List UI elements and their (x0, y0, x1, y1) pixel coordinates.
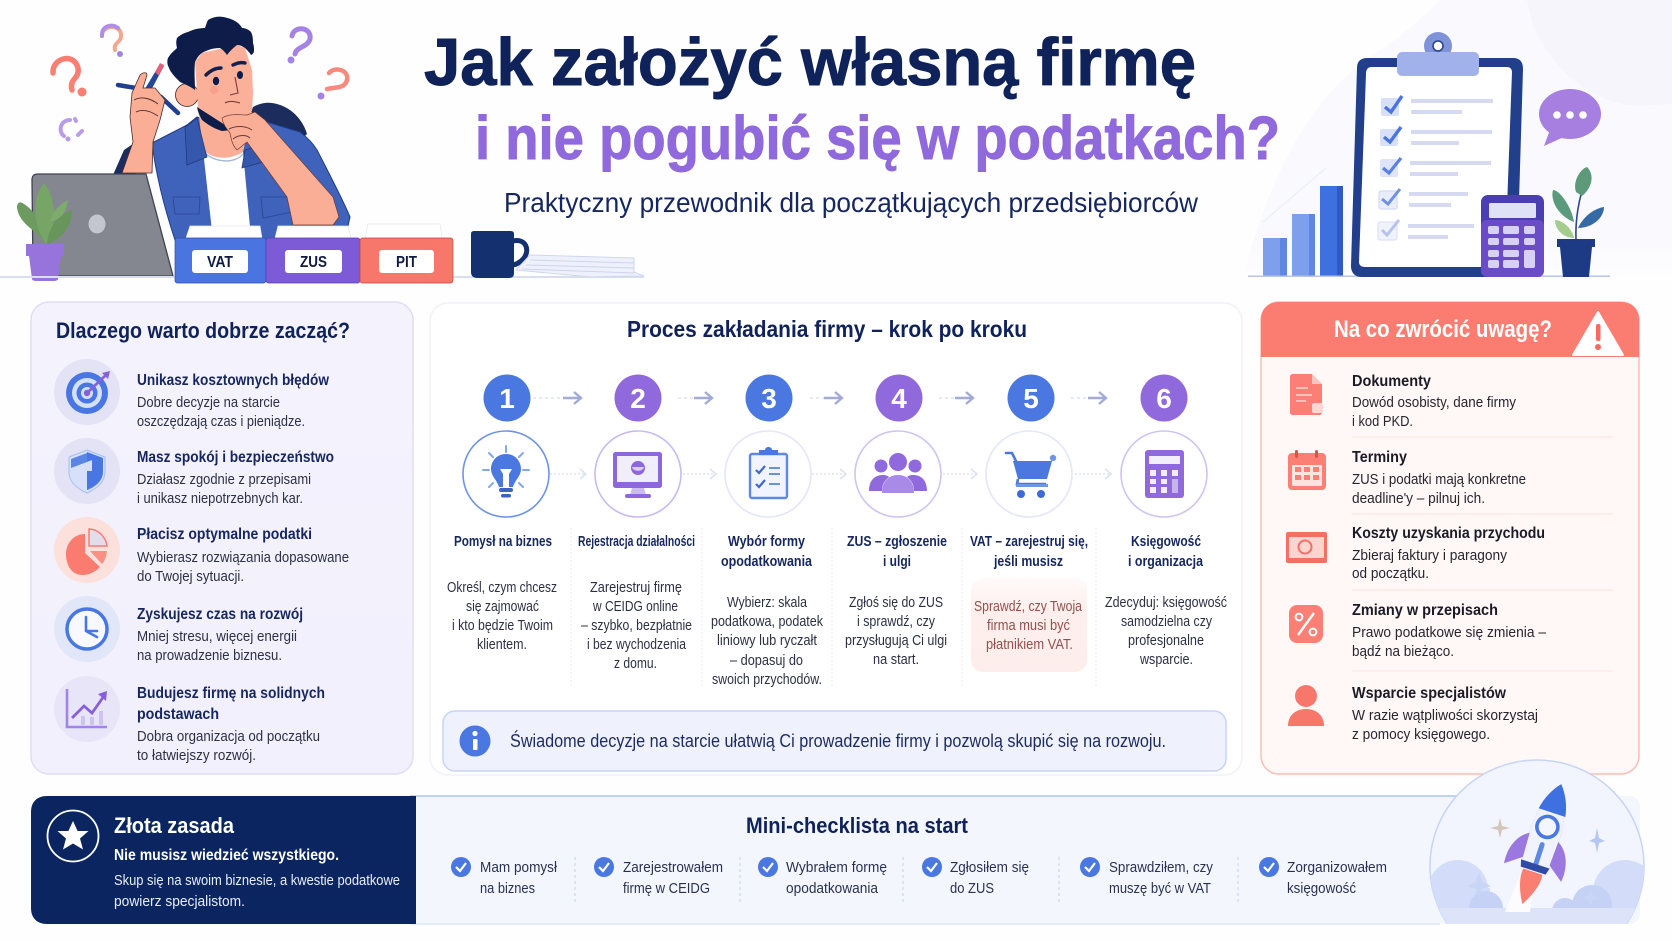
box PIT (360, 238, 453, 283)
step 3: Wybierz: skala (727, 595, 808, 611)
item: avoid costly mistakes: Unikasz kosztownych błędów (137, 372, 330, 389)
left arm and hand with pen (118, 63, 178, 173)
step 3: – dopasuj do (730, 653, 803, 669)
shirt (152, 117, 350, 240)
panel heading: Na co zwrócić uwagę? (1334, 316, 1552, 343)
plant (1552, 167, 1604, 277)
number row arrows (533, 392, 1106, 404)
box VAT (175, 238, 266, 283)
check item 2 (594, 857, 723, 897)
checklist rows (1378, 96, 1493, 240)
step 6: 6 (1156, 383, 1172, 414)
step 3: Wybór formy (728, 534, 805, 550)
item: peace and security: Masz spokój i bezpieczeństwo (137, 449, 334, 466)
item: documents: Dokumenty (1352, 373, 1431, 390)
item: documents (1290, 373, 1516, 430)
item: income costs: Koszty uzyskania przychodu (1352, 525, 1545, 542)
panel: what to watch out for (1261, 302, 1639, 774)
step 3: liniowy lub ryczałt (717, 633, 817, 649)
step 4: ZUS – zgłoszenie (847, 534, 947, 550)
step 2: i bez wychodzenia (587, 637, 687, 653)
step 2: Rejestracja działalności (578, 534, 695, 550)
box ZUS: ZUS (300, 254, 327, 271)
stars (1468, 818, 1605, 893)
step 2: 2 (630, 383, 646, 414)
step 5: jeśli musisz (993, 554, 1063, 570)
pockets (173, 197, 292, 218)
step 2: Zarejestruj firmę (590, 580, 682, 596)
panel: golden rule: Nie musisz wiedzieć wszystkiego. (114, 847, 339, 864)
item: deadlines: Terminy (1352, 449, 1407, 466)
step 2: – szybko, bezpłatnie (581, 618, 692, 634)
step 4: i ulgi (883, 554, 911, 570)
step 4: przysługują Ci ulgi (845, 633, 947, 649)
icon: group of people (869, 453, 927, 493)
callout: VAT warning: płatnikiem VAT. (986, 637, 1073, 653)
item: income costs (1286, 525, 1545, 582)
callout: VAT warning: firma musi być (987, 618, 1070, 634)
check item 4: do ZUS (950, 881, 994, 897)
panel: golden rule: powierz specjalistom. (114, 894, 245, 910)
item: time for growth: na prowadzenie biznesu. (137, 648, 282, 664)
item: solid foundations: to łatwiejszy rozwój. (137, 748, 256, 764)
box VAT: VAT (207, 254, 233, 271)
check item 5: muszę być w VAT (1109, 881, 1211, 897)
item: documents: Dowód osobisty, dane firmy (1352, 394, 1516, 411)
neck (198, 108, 252, 158)
item: income costs: Zbieraj faktury i paragony (1352, 547, 1507, 564)
item: regulation changes: bądź na bieżąco. (1352, 643, 1454, 660)
item: deadlines: deadline'y – pilnuj ich. (1352, 490, 1485, 507)
panel: golden rule (31, 796, 416, 924)
step 1: klientem. (477, 637, 527, 653)
step 5 (970, 374, 1088, 672)
step 2 (578, 374, 695, 672)
check item 1: Mam pomysł (480, 860, 558, 876)
tax boxes (175, 224, 453, 283)
item: avoid costly mistakes: Dobre decyzje na starcie (137, 395, 280, 411)
step 3 (711, 374, 824, 688)
check item 2: firmę w CEIDG (623, 881, 710, 897)
item: regulation changes (1289, 602, 1547, 660)
rocket illustration (1429, 759, 1645, 924)
bar chart (1248, 168, 1610, 277)
clouds (1428, 860, 1657, 926)
panel: mini checklist (410, 796, 1640, 924)
check item 3: opodatkowania (786, 881, 879, 897)
panel: golden rule: Skup się na swoim biznesie, a kwestie podatkowe (114, 873, 400, 889)
check item 6: Zorganizowałem (1287, 860, 1387, 876)
title: Jak założyć własną firmę (424, 25, 1196, 100)
mug (471, 231, 527, 278)
subtitle: Praktyczny przewodnik dla początkujących przedsiębiorców (504, 187, 1198, 218)
check item 3: Wybrałem formę (786, 860, 887, 876)
step 3: opodatkowania (721, 554, 813, 570)
step 2: w CEIDG online (592, 599, 678, 615)
exhaust trail (1505, 875, 1535, 912)
t-shirt (203, 150, 252, 240)
item: deadlines: ZUS i podatki mają konkretne (1352, 471, 1526, 488)
plant with purple pot (17, 183, 72, 281)
item: optimal taxes: Płacisz optymalne podatki (137, 526, 312, 543)
check item 2: Zarejestrowałem (623, 860, 723, 876)
step 6: samodzielna czy (1121, 614, 1213, 630)
desk line (0, 276, 644, 278)
checklist heading: Mini-checklista na start (746, 813, 969, 838)
item: documents: i kod PKD. (1352, 413, 1413, 430)
item: optimal taxes (54, 517, 349, 585)
panel heading: Proces zakładania firmy – krok po kroku (627, 316, 1027, 342)
item: specialist support: z pomocy księgowego. (1352, 726, 1490, 743)
panel heading: Dlaczego warto dobrze zacząć? (56, 318, 350, 343)
question marks (53, 26, 347, 142)
panel: why start well (31, 302, 413, 774)
check item 5: Sprawdziłem, czy (1109, 860, 1214, 876)
check item 5 (1080, 857, 1214, 897)
step 6: wsparcie. (1139, 652, 1193, 668)
collar (185, 118, 263, 168)
clipboard (1351, 58, 1523, 277)
item: solid foundations (54, 676, 325, 764)
step 4 (845, 374, 947, 668)
item: solid foundations: podstawach (137, 706, 219, 723)
step 6 (1105, 374, 1227, 668)
chair (113, 103, 307, 175)
dividers (1352, 437, 1613, 671)
right arm and chin hand (222, 112, 339, 225)
item: optimal taxes: do Twojej sytuacji. (137, 569, 244, 585)
header illustration: thinking entrepreneur at desk (53, 17, 350, 240)
step 4: Zgłoś się do ZUS (849, 595, 943, 611)
step 5: 5 (1023, 383, 1039, 414)
item: regulation changes: Zmiany w przepisach (1352, 602, 1498, 619)
step 1: 1 (499, 383, 515, 414)
step 2: z domu. (614, 656, 657, 672)
step 3: 3 (761, 383, 777, 414)
item: specialist support (1288, 685, 1538, 743)
panel: golden rule: Złota zasada (114, 813, 235, 838)
step 5: VAT – zarejestruj się, (970, 534, 1088, 550)
step 3: swoich przychodów. (712, 672, 822, 688)
header illustration: clipboard, chart and calculator (1248, 32, 1610, 277)
icon: calculator (1145, 450, 1184, 498)
panel: process steps (430, 303, 1242, 775)
icon: computer monitor (613, 452, 662, 498)
check item 1: na biznes (480, 881, 535, 897)
step 6: Zdecyduj: księgowość (1105, 595, 1227, 611)
step 1: Pomysł na biznes (454, 534, 552, 550)
face (195, 45, 253, 123)
item: income costs: od początku. (1352, 565, 1429, 582)
icon: clipboard checklist (750, 447, 787, 498)
check item 6 (1259, 857, 1387, 897)
check item 1 (451, 857, 558, 897)
separators (575, 857, 1238, 902)
item: regulation changes: Prawo podatkowe się zmienia – (1352, 624, 1547, 641)
icon: star badge (48, 810, 98, 862)
item: specialist support: W razie wątpliwości skorzystaj (1352, 707, 1538, 724)
item: time for growth (54, 596, 303, 664)
ear (176, 84, 198, 106)
icon: warning triangle (1573, 312, 1623, 355)
info callout: Świadome decyzje na starcie ułatwią Ci prowadzenie firmy i pozwolą skupić się na rozwoju. (510, 730, 1166, 751)
item: peace and security: i unikasz niepotrzebnych kar. (137, 491, 303, 507)
item: optimal taxes: Wybierasz rozwiązania dopasowane (137, 550, 349, 566)
item: solid foundations: Dobra organizacja od początku (137, 729, 320, 745)
step 1: się zajmować (466, 599, 539, 615)
icon: shopping cart (1006, 453, 1056, 498)
item: specialist support: Wsparcie specjalistów (1352, 685, 1507, 702)
step 4: 4 (891, 383, 907, 414)
icon: light bulb (483, 446, 529, 498)
step 6: i organizacja (1128, 554, 1204, 570)
step 1 (447, 374, 557, 653)
callout: VAT warning (971, 578, 1087, 672)
step 4: na start. (873, 652, 919, 668)
icon row arrows (550, 469, 1111, 479)
check item 6: księgowość (1287, 881, 1356, 897)
column dividers (571, 528, 1096, 688)
box ZUS (266, 238, 360, 283)
step 6: profesjonalne (1128, 633, 1204, 649)
item: avoid costly mistakes (54, 359, 330, 430)
info callout (443, 711, 1226, 771)
item: avoid costly mistakes: oszczędzają czas i pieniądze. (137, 414, 305, 430)
speech bubble (1539, 89, 1601, 146)
item: peace and security (54, 438, 334, 507)
item: deadlines (1288, 449, 1526, 507)
item: time for growth: Mniej stresu, więcej energii (137, 629, 297, 645)
step 1: Określ, czym chcesz (447, 580, 557, 596)
stack of papers (516, 255, 644, 277)
step 3: podatkowa, podatek (711, 614, 824, 630)
rocket (1504, 784, 1566, 904)
item: time for growth: Zyskujesz czas na rozwój (137, 606, 303, 623)
callout: VAT warning: Sprawdź, czy Twoja (974, 599, 1083, 615)
calculator (1481, 195, 1544, 277)
item: solid foundations: Budujesz firmę na solidnych (137, 685, 325, 702)
eyebrows and eyes (206, 63, 245, 75)
item: peace and security: Działasz zgodnie z przepisami (137, 472, 311, 488)
laptop (32, 174, 173, 276)
header background shapes (1240, 0, 1672, 288)
check item 3 (758, 857, 887, 897)
title (424, 25, 1280, 172)
step 6: Księgowość (1131, 534, 1201, 550)
title second line: i nie pogubić się w podatkach? (475, 104, 1280, 172)
check item 4: Zgłosiłem się (950, 860, 1029, 876)
hair (167, 17, 254, 90)
papers (186, 224, 442, 238)
step 4: i sprawdź, czy (857, 614, 936, 630)
box PIT: PIT (396, 254, 417, 271)
beard shadow (197, 107, 232, 131)
check item 4 (922, 857, 1029, 897)
step 1: i kto będzie Twoim (452, 618, 553, 634)
